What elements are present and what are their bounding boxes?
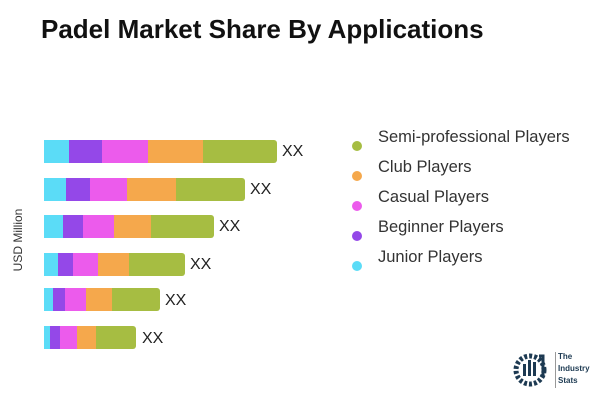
logo: The	[558, 352, 572, 361]
bar chart: XX	[219, 218, 240, 235]
axis label: USD Million	[11, 209, 25, 271]
legend: Club Players	[378, 158, 472, 176]
legend	[352, 128, 570, 271]
legend: Beginner Players	[378, 218, 504, 236]
logo: Stats	[558, 376, 578, 385]
bar chart: XX	[165, 292, 186, 309]
bar chart: XX	[190, 256, 211, 273]
bar chart: XX	[282, 143, 303, 160]
title: Padel Market Share By Applications	[41, 14, 484, 44]
logo: Industry	[558, 364, 590, 373]
bar chart: XX	[142, 330, 163, 347]
logo	[514, 352, 590, 388]
legend: Semi-professional Players	[378, 128, 570, 146]
legend: Casual Players	[378, 188, 489, 206]
bar chart: XX	[250, 181, 271, 198]
bar chart	[44, 140, 303, 349]
legend: Junior Players	[378, 248, 483, 266]
